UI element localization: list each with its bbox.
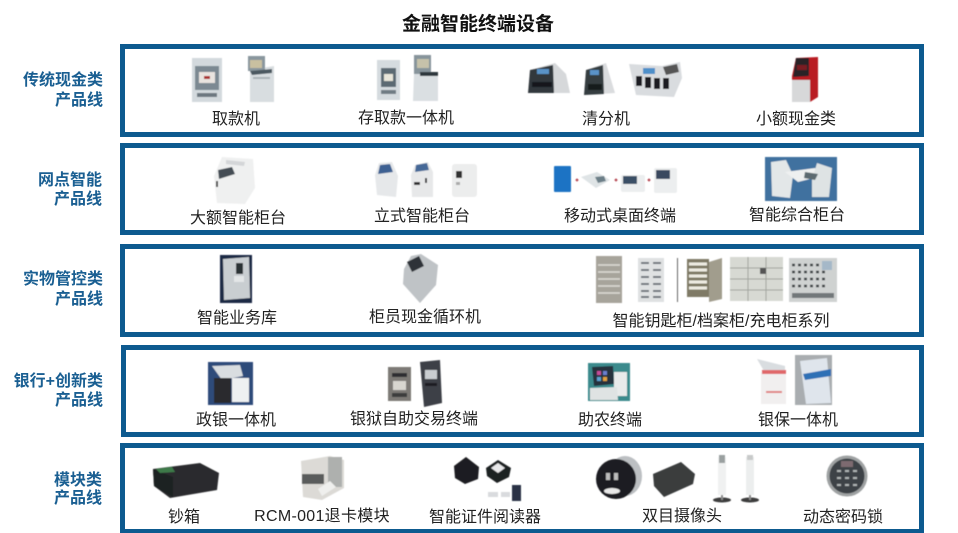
category label: 银行+创新类产品线: 产品线 bbox=[55, 390, 103, 409]
icon: 银保一体机 bbox=[757, 355, 832, 405]
category label: 模块类产品线: 模块类 bbox=[54, 471, 102, 489]
label: 智能业务库: 智能业务库 bbox=[197, 309, 277, 327]
row: 银行+创新类产品线 bbox=[14, 348, 922, 434]
panel: 传统现金类 bbox=[122, 46, 922, 134]
label: 智能证件阅读器: 智能证件阅读器 bbox=[429, 508, 541, 526]
icon: 移动式桌面终端 bbox=[554, 166, 677, 193]
icon: 银狱自助交易终端 bbox=[388, 360, 442, 407]
category label: 传统现金类产品线: 传统现金类 bbox=[23, 70, 103, 89]
icon: 柜员现金循环机 bbox=[403, 254, 438, 303]
icon: 取款机 bbox=[192, 56, 274, 102]
label: 存取款一体机: 存取款一体机 bbox=[358, 109, 454, 127]
label: 银狱自助交易终端: 银狱自助交易终端 bbox=[350, 410, 478, 428]
label: 清分机: 清分机 bbox=[582, 110, 630, 128]
panel: 模块类 bbox=[122, 446, 922, 532]
category label: 网点智能产品线: 产品线 bbox=[54, 189, 102, 208]
row: 网点智能产品线 bbox=[38, 146, 922, 232]
category label: 实物管控类产品线: 产品线 bbox=[55, 289, 103, 308]
label: 大额智能柜台: 大额智能柜台 bbox=[190, 209, 286, 227]
row: 实物管控类产品线 bbox=[23, 246, 922, 334]
icon: 钥匙柜 bbox=[596, 256, 622, 303]
label: 智能综合柜台: 智能综合柜台 bbox=[749, 206, 845, 224]
row: 传统现金类产品线 bbox=[23, 46, 922, 134]
icon: 清分机 bbox=[528, 62, 682, 97]
icon: 立式智能柜台 bbox=[375, 162, 477, 197]
icon: 智能证件阅读器 bbox=[454, 457, 521, 501]
label: 银保一体机: 银保一体机 bbox=[758, 411, 838, 429]
icon: 钞箱 bbox=[153, 463, 219, 498]
label: 钞箱: 钞箱 bbox=[168, 508, 200, 526]
icon: 双目摄像头 bbox=[596, 455, 759, 502]
category label: 网点智能产品线: 网点智能 bbox=[38, 170, 102, 189]
icon: 智能综合柜台 bbox=[765, 157, 837, 201]
icon: 档案柜 bbox=[638, 258, 664, 302]
label: 立式智能柜台: 立式智能柜台 bbox=[374, 207, 470, 225]
icon: 智能业务库 bbox=[220, 255, 252, 303]
icon: 助农终端 bbox=[588, 363, 630, 401]
label: 助农终端: 助农终端 bbox=[578, 411, 642, 429]
label: 政银一体机: 政银一体机 bbox=[196, 411, 276, 429]
label: RCM-001退卡模块: RCM-001退卡模块 bbox=[254, 507, 390, 525]
panel: 银行+创新类 bbox=[124, 348, 922, 434]
icon: RCM-001退卡模块 bbox=[301, 456, 344, 500]
label: 取款机: 取款机 bbox=[212, 110, 260, 128]
icon: 存取款一体机 bbox=[377, 55, 438, 101]
icon: 动态密码锁 bbox=[826, 456, 868, 496]
row: 模块类产品线 bbox=[54, 446, 922, 532]
category label: 实物管控类产品线: 实物管控类 bbox=[23, 269, 103, 288]
icon: 小额现金类 bbox=[792, 57, 818, 102]
icon: 开门柜 bbox=[677, 258, 722, 302]
panel: 网点智能 bbox=[122, 146, 922, 232]
category label: 银行+创新类产品线: 银行+创新类 bbox=[14, 371, 103, 390]
label: 双目摄像头: 双目摄像头 bbox=[642, 507, 722, 525]
panel: 实物管控类 bbox=[122, 246, 922, 334]
label: 智能钥匙柜/档案柜/充电柜系列: 智能钥匙柜/档案柜/充电柜系列 bbox=[613, 312, 829, 330]
icon: 大额智能柜台 bbox=[214, 157, 255, 204]
label: 柜员现金循环机: 柜员现金循环机 bbox=[369, 308, 481, 326]
label: 动态密码锁: 动态密码锁 bbox=[803, 508, 883, 526]
category label: 模块类产品线: 产品线 bbox=[54, 488, 102, 507]
label: 小额现金类: 小额现金类 bbox=[756, 110, 836, 128]
category label: 传统现金类产品线: 产品线 bbox=[55, 90, 103, 109]
title: 金融智能终端设备 bbox=[402, 12, 554, 35]
icon: 充电柜 bbox=[730, 257, 783, 301]
label: 移动式桌面终端: 移动式桌面终端 bbox=[564, 207, 676, 225]
icon: 政银一体机 bbox=[208, 362, 253, 405]
icon: 钥匙管理柜 bbox=[789, 258, 837, 302]
